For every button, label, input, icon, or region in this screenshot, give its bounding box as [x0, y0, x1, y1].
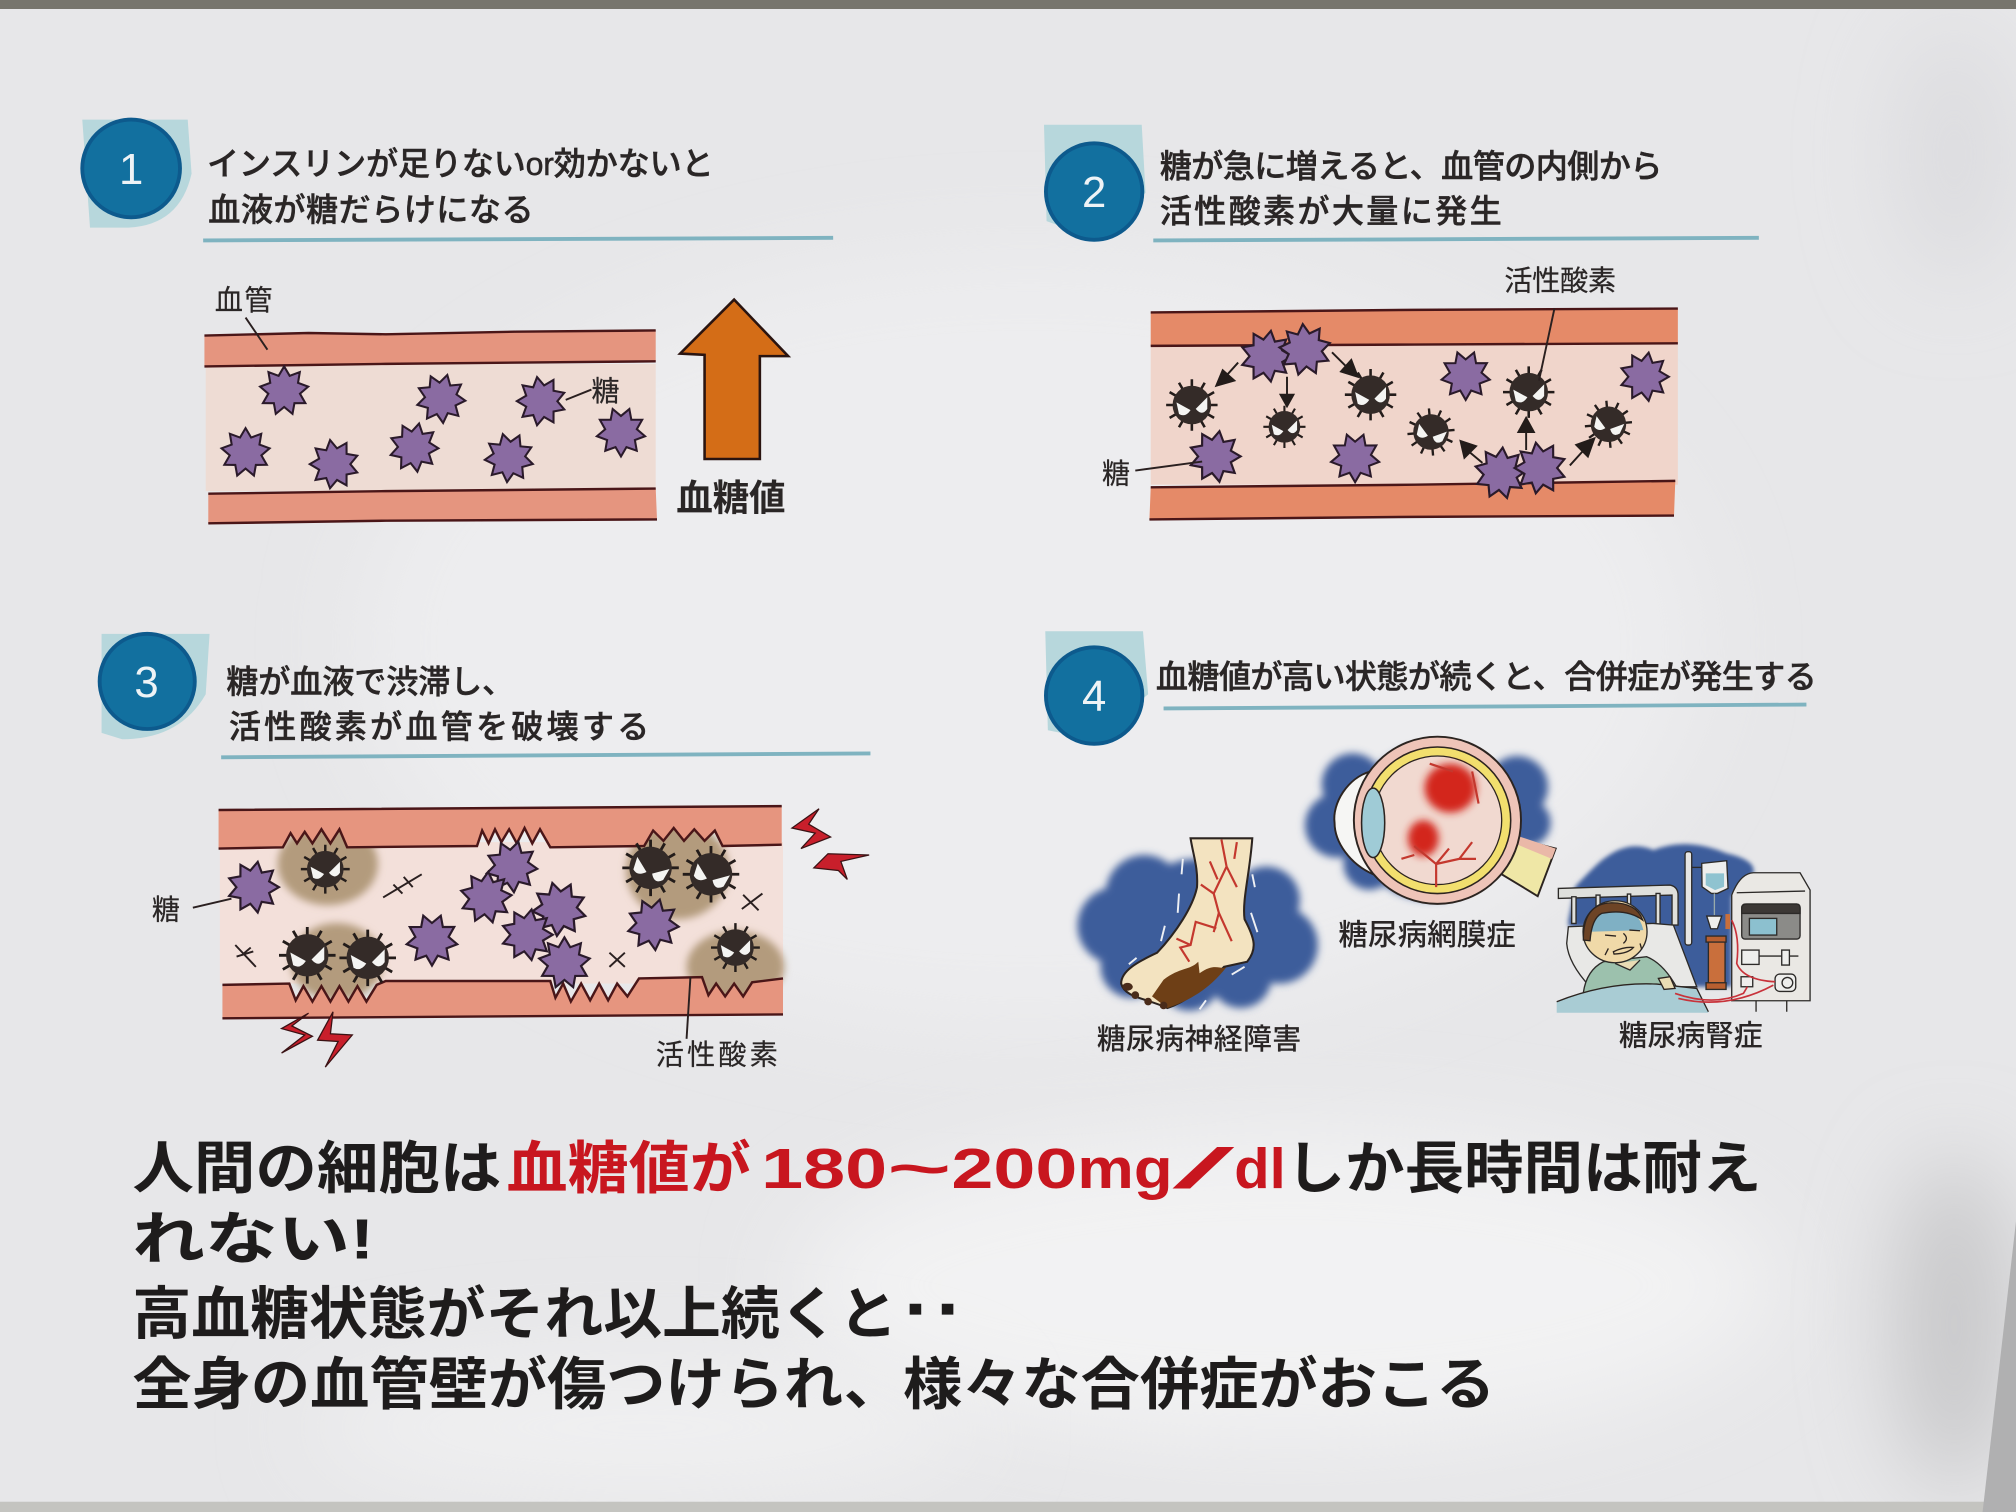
blood vessel diagram 3	[152, 806, 784, 1071]
arrow: blood sugar rising	[676, 300, 788, 518]
heading 2: 活性酸素が大量に発生	[1160, 193, 1502, 229]
blood vessel diagram 1	[204, 284, 657, 523]
message line 4: 全身の血管壁が傷つけられ、様々な合併症がおこる	[132, 1353, 1495, 1416]
badge 1	[82, 120, 192, 228]
panel 2: reactive oxygen generated	[1044, 125, 1759, 519]
message line 1	[132, 1137, 1761, 1200]
message line 1: /	[1173, 1137, 1235, 1200]
message line 1: しか長時間は耐え	[1286, 1137, 1761, 1200]
blood vessel diagram 3: 活性酸素	[656, 1039, 778, 1071]
heading 3: 糖が血液で渋滞し、	[226, 664, 514, 700]
message line 1: 180	[761, 1137, 887, 1200]
blood vessel diagram 2: 糖	[1102, 457, 1130, 489]
damaged areas	[278, 822, 784, 1003]
heading 3: 活性酸素が血管を破壊する	[229, 709, 649, 745]
badge 2	[1044, 125, 1146, 240]
blood vessel diagram 2: 活性酸素	[1504, 265, 1616, 297]
blood vessel diagram 1: 血管	[215, 284, 273, 316]
arrow: blood sugar rising: 血糖値	[676, 477, 786, 518]
blood vessel diagram 2	[1102, 265, 1678, 519]
badge 3	[100, 634, 210, 739]
badge 3: 3	[134, 658, 159, 707]
badge 1: 1	[119, 145, 143, 194]
blood vessel diagram 3: 糖	[152, 893, 180, 925]
illustration: nephropathy dialysis patient: 糖尿病腎症	[1619, 1020, 1763, 1052]
message line 1: dl	[1234, 1137, 1286, 1200]
message line 1: 200	[951, 1137, 1077, 1200]
message line 1: 血糖値が	[507, 1137, 751, 1200]
heading 1: 血液が糖だらけになる	[208, 192, 534, 228]
badge 4: 4	[1082, 672, 1106, 721]
message line 1: mg	[1077, 1137, 1173, 1200]
panel 3: vessels destroyed	[100, 634, 870, 1071]
illustration: nephropathy dialysis patient	[1557, 844, 1810, 1052]
heading 4: 血糖値が高い状態が続くと、合併症が発生する	[1156, 659, 1817, 695]
illustration: retinopathy eye: 糖尿病網膜症	[1338, 919, 1516, 952]
message line 2: れない!	[132, 1208, 374, 1271]
heading 3	[221, 664, 870, 757]
lightning bolts	[282, 809, 869, 1067]
debris marks	[235, 874, 762, 967]
badge 2: 2	[1082, 168, 1106, 217]
heading 2	[1153, 148, 1759, 240]
heading 1: インスリンが足りないor効かないと	[207, 146, 714, 182]
message line 1: 人間の細胞は	[132, 1137, 501, 1200]
bottom message	[132, 1137, 1761, 1416]
panel 1: insulin shortage	[82, 120, 833, 523]
illustration: neuropathy foot	[1077, 838, 1318, 1056]
heading 1	[203, 146, 833, 240]
message line 3: 高血糖状態がそれ以上続くと	[132, 1282, 897, 1345]
badge 4	[1045, 631, 1148, 744]
heading 2: 糖が急に増えると、血管の内側から	[1160, 148, 1662, 184]
illustration: neuropathy foot: 糖尿病神経障害	[1097, 1024, 1301, 1056]
small arrows	[1216, 352, 1594, 465]
blood vessel diagram 1: 糖	[591, 375, 620, 407]
illustration: retinopathy eye	[1305, 737, 1556, 952]
message line 1: ~	[887, 1137, 951, 1200]
panel 4: complications	[1045, 631, 1817, 1056]
message dots	[910, 1304, 953, 1315]
